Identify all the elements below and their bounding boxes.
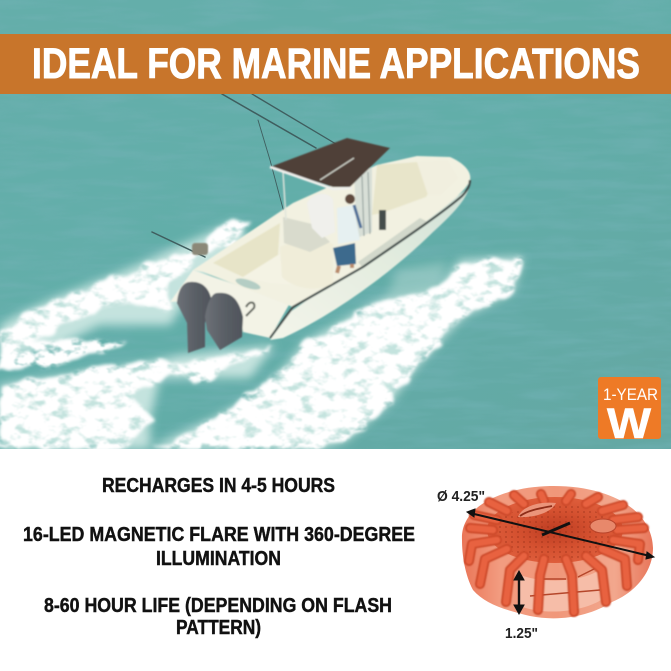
feature: recharge: RECHARGES IN 4-5 HOURS <box>102 475 335 497</box>
feature: LED line 1: 16-LED MAGNETIC FLARE WITH 360-DEGREE <box>23 524 415 546</box>
hull side <box>270 188 469 340</box>
label: diameter: Ø 4.25" <box>437 488 485 505</box>
T-top frame <box>283 168 372 238</box>
boat <box>170 138 470 353</box>
cockpit aft <box>213 223 280 277</box>
label: height: 1.25" <box>505 625 538 642</box>
outboard motors <box>177 282 212 353</box>
text block: features <box>23 475 415 639</box>
diameter arrow <box>467 509 654 559</box>
cockpit forward <box>372 162 430 215</box>
flare ribs: face <box>469 494 644 612</box>
flare top face <box>487 497 623 563</box>
badge: 1-year warranty: W <box>607 400 651 448</box>
badge: 1-year warranty: 1-YEAR <box>603 385 658 404</box>
T-top canopy <box>270 138 390 187</box>
height arrow <box>514 571 524 614</box>
deck <box>193 156 470 307</box>
banner background <box>0 34 671 94</box>
side deck <box>358 218 428 268</box>
person left <box>307 194 335 238</box>
hatch <box>235 278 261 290</box>
flare side window <box>520 568 604 612</box>
flare ribs: dark edge <box>469 494 644 612</box>
console <box>281 250 333 286</box>
flare body <box>462 486 653 618</box>
transom <box>170 270 290 338</box>
fishing rods <box>152 94 336 257</box>
wake: foam behind the boat <box>0 220 523 449</box>
engine on rod <box>192 243 208 255</box>
photo: boat on teal water <box>0 0 671 449</box>
flare top recesses <box>518 503 556 517</box>
gunwale rail <box>270 180 470 338</box>
person right <box>333 194 361 273</box>
feature: life line 1: 8-60 HOUR LIFE (DEPENDING ON FLASH <box>44 595 392 617</box>
feature: life line 2: PATTERN) <box>176 617 261 639</box>
feature: LED line 2: ILLUMINATION <box>156 548 281 570</box>
product: LED flare <box>437 486 654 642</box>
badge: 1-year warranty <box>598 377 661 448</box>
